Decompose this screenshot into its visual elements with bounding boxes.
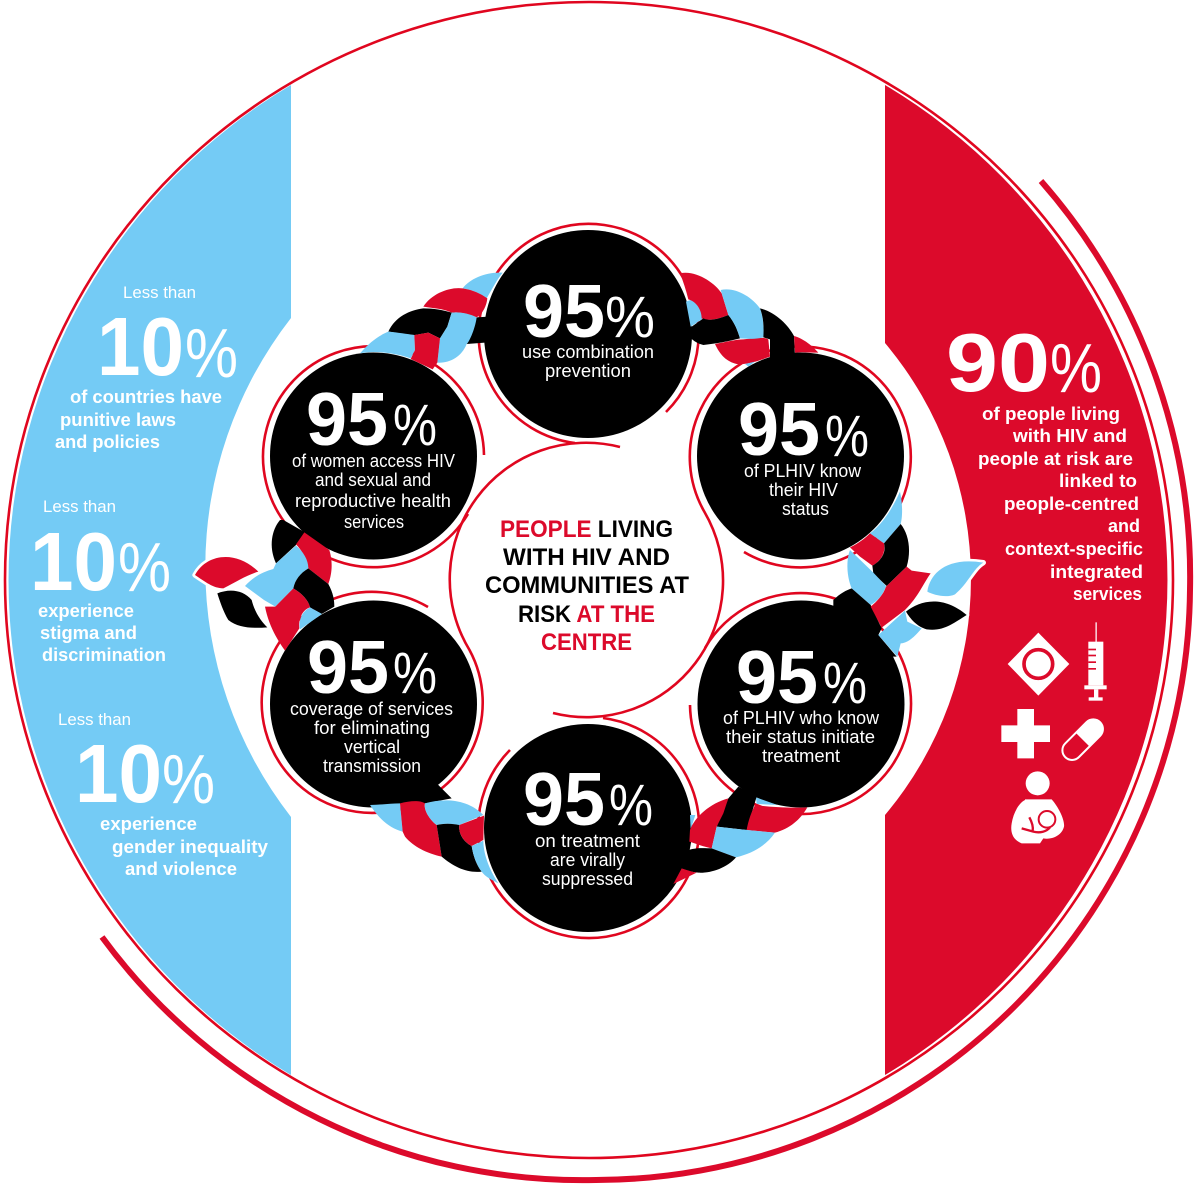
right stat: 90 percent linked to services: people at risk are <box>978 448 1133 469</box>
black circles <box>270 230 904 932</box>
left stat: gender inequality: % <box>162 740 215 818</box>
stat: virally suppressed: are virally <box>550 850 625 870</box>
left stat: punitive laws <box>55 283 238 452</box>
stat: women access services: and sexual and <box>315 470 431 490</box>
right stat: 90 percent linked to services: % <box>1050 329 1102 407</box>
icon: capsule <box>1058 715 1107 764</box>
stat: women access services: % <box>393 393 437 458</box>
left stat: gender inequality <box>58 710 269 879</box>
stat: women access services: reproductive health <box>295 491 451 511</box>
stat: know HIV status: their HIV <box>769 480 838 500</box>
left stat: punitive laws: punitive laws <box>60 409 176 430</box>
braid: top to upper right <box>680 273 818 367</box>
braid: lower left to upper left with leaves <box>195 520 334 651</box>
icon: syringe <box>1084 622 1107 701</box>
stat: use combination prevention: use combination <box>522 342 654 362</box>
stat: initiate treatment: 95 <box>736 635 818 719</box>
right stat: 90 percent linked to services: 90 <box>946 316 1050 409</box>
stat: virally suppressed: 95 <box>523 757 605 841</box>
stat: eliminating vertical transmission: % <box>393 641 437 706</box>
stat: know HIV status: status <box>782 499 829 519</box>
flower outline rings <box>262 224 911 938</box>
stat: know HIV status: % <box>825 404 869 469</box>
left stat: gender inequality: and violence <box>125 858 237 879</box>
stat: women access services: 95 <box>306 377 388 461</box>
centre text: RISK AT THE <box>518 601 655 628</box>
stat: virally suppressed <box>523 757 653 889</box>
left stat: stigma: Less than <box>43 497 116 516</box>
right stat: 90 percent linked to services: services <box>1073 583 1142 604</box>
stat: know HIV status: of PLHIV know <box>744 461 862 481</box>
left stat: gender inequality: 10 <box>75 727 162 820</box>
stat: virally suppressed: on treatment <box>535 831 640 851</box>
stat: initiate treatment: of PLHIV who know <box>723 708 880 728</box>
braid: upper left to top <box>360 273 503 369</box>
stat: eliminating vertical transmission: 95 <box>307 625 389 709</box>
right stat: 90 percent linked to services: and <box>1108 515 1140 536</box>
braid: bottom to lower left and lower right <box>370 783 807 884</box>
icon: medical cross <box>1001 709 1050 758</box>
icon: condom <box>1008 633 1069 696</box>
right stat: 90 percent linked to services: with HIV and <box>1012 425 1127 446</box>
left stat: gender inequality: gender inequality <box>112 836 269 857</box>
left stat: stigma: discrimination <box>42 644 166 665</box>
left stat: stigma: stigma and <box>40 622 137 643</box>
left stat: stigma: 10 <box>30 515 117 608</box>
outer thick arc <box>102 181 1190 1180</box>
stat: know HIV status: 95 <box>738 387 820 471</box>
left stat: stigma: experience <box>38 600 134 621</box>
left stat: punitive laws: of countries have <box>70 386 222 407</box>
left stat: stigma: % <box>118 528 171 606</box>
icons: prevention and treatment <box>1001 622 1107 843</box>
panel: right red band <box>885 85 1167 1075</box>
stat: virally suppressed: suppressed <box>542 869 633 889</box>
left stat: stigma <box>30 497 171 665</box>
stat: eliminating vertical transmission: coverage of services <box>290 699 453 719</box>
stat: eliminating vertical transmission: transmission <box>323 756 421 776</box>
icon: mother and baby <box>1011 771 1064 843</box>
centre text: COMMUNITIES AT <box>485 572 689 599</box>
centre text <box>485 516 689 656</box>
stat: women access services: of women access HIV <box>292 451 455 471</box>
stat: initiate treatment: their status initiate <box>726 727 875 747</box>
left stat: gender inequality: Less than <box>58 710 131 729</box>
left stat: punitive laws: Less than <box>123 283 196 302</box>
right stat: 90 percent linked to services: people-centred <box>1004 493 1139 514</box>
stat: eliminating vertical transmission: vertical <box>344 737 400 757</box>
stat: use combination prevention: 95 <box>523 269 605 353</box>
stat: initiate treatment <box>723 635 880 766</box>
right stat: 90 percent linked to services: of people living <box>982 403 1120 424</box>
left stat: punitive laws: 10 <box>97 300 184 393</box>
stat: use combination prevention: % <box>605 285 655 350</box>
centre text: WITH HIV AND <box>503 544 670 571</box>
stat: know HIV status <box>738 387 869 519</box>
stat: use combination prevention: prevention <box>545 361 631 381</box>
right stat: 90 percent linked to services: context-specific <box>1005 538 1143 559</box>
centre text: CENTRE <box>541 629 632 656</box>
stat: initiate treatment: % <box>823 651 867 716</box>
left stat: gender inequality: experience <box>100 813 197 834</box>
stat: eliminating vertical transmission <box>290 625 453 776</box>
right stat: 90 percent linked to services: linked to <box>1059 470 1137 491</box>
stat: virally suppressed: % <box>609 773 653 838</box>
stat: initiate treatment: treatment <box>762 746 840 766</box>
left stat: punitive laws: and policies <box>55 431 160 452</box>
right stat: 90 percent linked to services <box>946 316 1143 604</box>
centre text: PEOPLE LIVING <box>500 516 673 543</box>
right stat: 90 percent linked to services: integrated <box>1050 561 1143 582</box>
braid: upper right to lower right with leaves <box>833 492 983 657</box>
stat: women access services: services <box>344 512 404 532</box>
left stat: punitive laws: % <box>185 314 238 392</box>
panel: left blue band <box>9 85 291 1075</box>
stat: use combination prevention <box>522 269 655 381</box>
stat: eliminating vertical transmission: for eliminating <box>314 718 430 738</box>
stat: women access services <box>292 377 455 532</box>
